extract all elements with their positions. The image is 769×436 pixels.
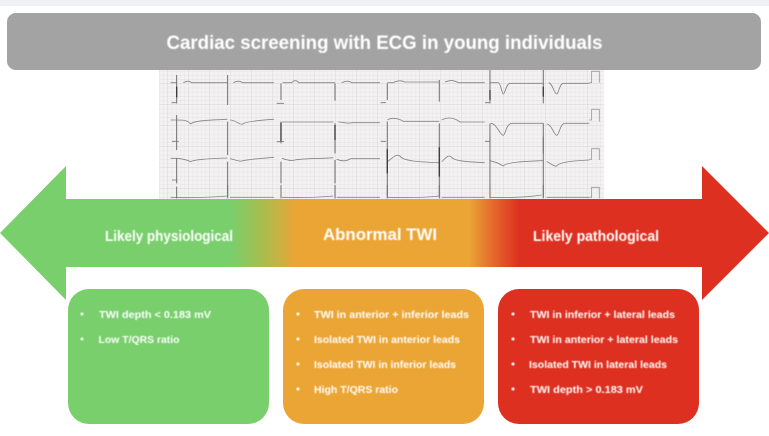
bullet list: pathological: TWI in anterior + lateral leads [530,334,678,346]
title: Cardiac screening with ECG in young individuals [166,33,602,54]
bullet list: abnormal: TWI in anterior + inferior leads [314,309,469,321]
ECG trace panel [159,70,604,200]
bullet list: abnormal: Isolated TWI in anterior leads [314,334,460,346]
bullet list: physiological [80,309,211,346]
panel: abnormal TWI criteria [283,289,484,424]
bullet list: physiological: TWI depth < 0.183 mV [99,309,211,321]
bullet list: abnormal [296,309,469,396]
top strip [0,0,769,6]
bullet list: pathological: Isolated TWI in lateral leads [529,359,667,371]
panel: likely physiological criteria [68,289,269,424]
label: likely physiological: Likely physiological [105,229,233,245]
bullet list: pathological: TWI depth > 0.183 mV [530,384,643,396]
bullet list: abnormal: High T/QRS ratio [314,384,398,396]
bullet list: pathological [512,309,678,396]
bullet list: abnormal: Isolated TWI in inferior leads [314,359,456,371]
double-headed gradient arrow [0,166,769,300]
bullet list: physiological: Low T/QRS ratio [98,334,180,346]
bullet list: pathological: TWI in inferior + lateral leads [530,309,675,321]
label: abnormal TWI: Abnormal TWI [323,226,437,244]
panel: likely pathological criteria [498,289,699,424]
label: likely pathological: Likely pathological [533,229,659,245]
title banner [7,13,761,70]
